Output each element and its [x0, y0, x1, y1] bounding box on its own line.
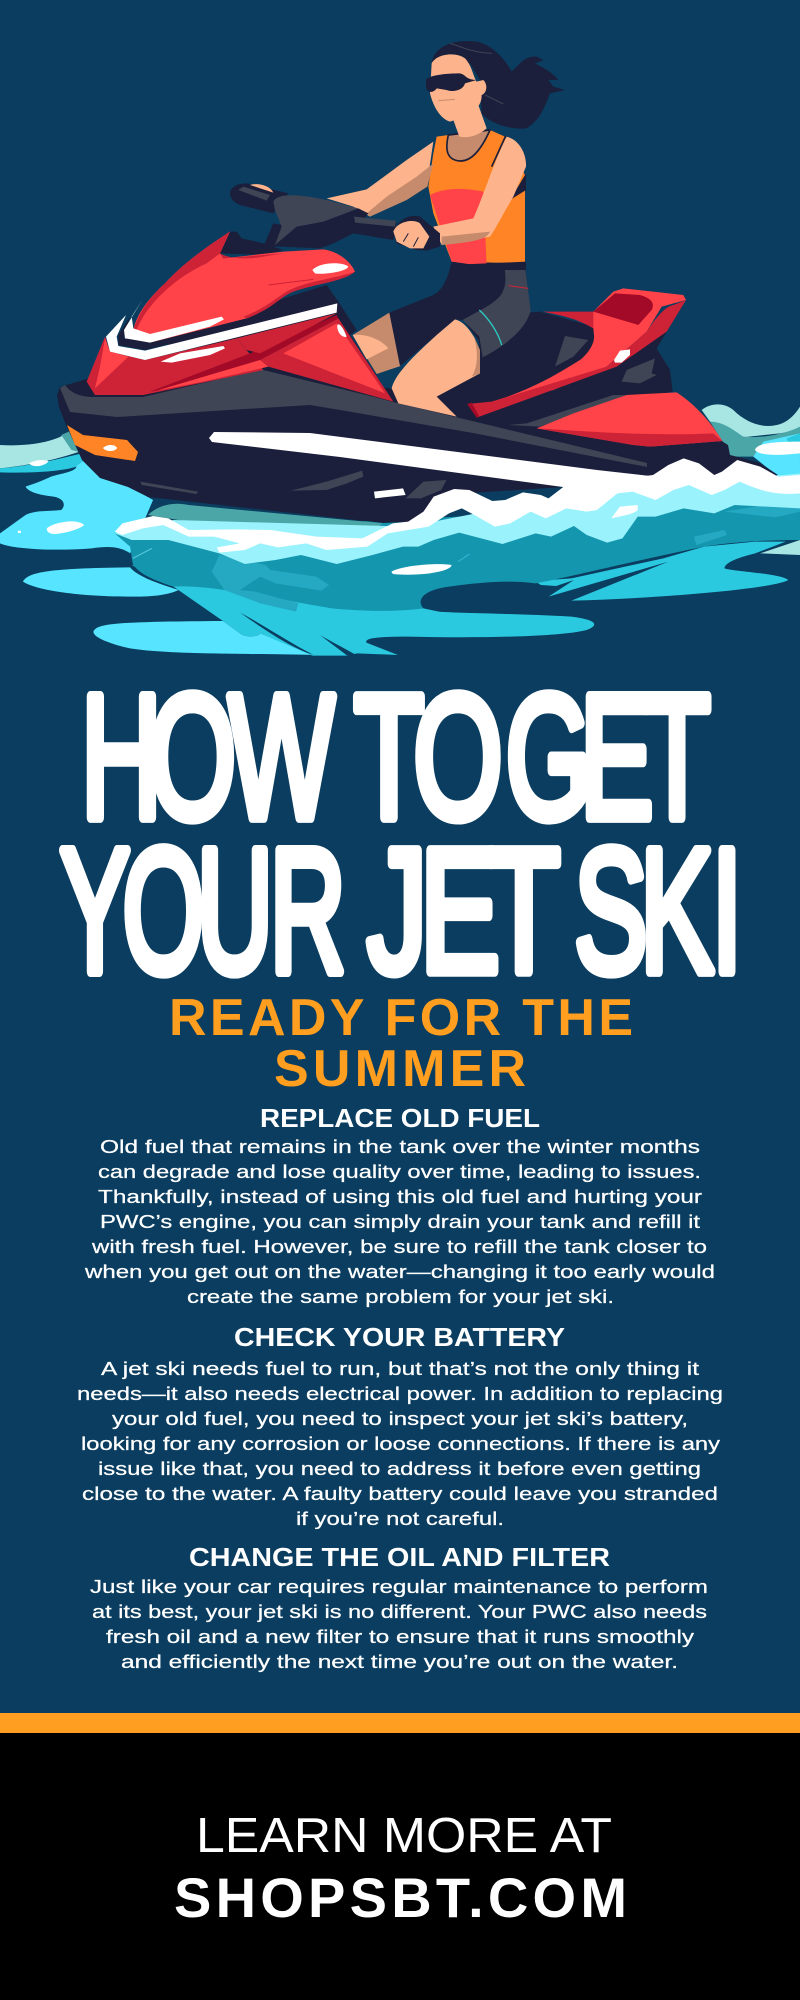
title [60, 658, 742, 1010]
orange divider band [0, 1713, 800, 1733]
far leg [353, 313, 401, 374]
hand and glove [393, 216, 440, 251]
left grip [230, 183, 288, 213]
body text: issue like that, you need to address it before even getting [98, 1458, 701, 1479]
front cowl [87, 232, 393, 402]
body text: if you’re not careful. [296, 1508, 504, 1529]
section: replace old fuel [84, 1103, 715, 1307]
body text: looking for any corrosion or loose connections. If there is any [81, 1433, 721, 1454]
body text [90, 1576, 708, 1672]
handlebar centre [263, 208, 397, 248]
heading: REPLACE OLD FUEL [260, 1103, 540, 1133]
title line 1: GET [506, 659, 711, 856]
body text: when you get out on the water—changing it too early would [84, 1261, 715, 1282]
subtitle: SUMMER [274, 1040, 526, 1098]
neck and face [453, 105, 487, 137]
footer panel [0, 1733, 800, 2000]
body text: create the same problem for your jet ski. [187, 1286, 614, 1307]
rider's shorts and near leg [389, 262, 531, 417]
section: change the oil and filter [90, 1542, 708, 1672]
title line 1 [81, 658, 711, 856]
title line 2: YOUR [60, 812, 346, 1009]
body text: needs—it also needs electrical power. In addition to replacing [77, 1383, 723, 1404]
body text: PWC’s engine, you can simply drain your tank and refill it [100, 1211, 700, 1232]
body text: fresh oil and a new filter to ensure that it runs smoothly [106, 1626, 695, 1647]
call to action: LEARN MORE AT [196, 1808, 612, 1863]
title line 1: TO [354, 658, 503, 855]
heading: CHECK YOUR BATTERY [234, 1322, 565, 1352]
website: SHOPSBT.COM [174, 1866, 627, 1929]
illustration: woman riding a red jet ski on water [0, 41, 800, 656]
sunglasses [426, 73, 477, 92]
body text: Old fuel that remains in the tank over the winter months [100, 1136, 700, 1157]
water behind and around the jet ski [0, 432, 800, 656]
far arm [327, 142, 433, 217]
body text: and efficiently the next time you’re out on the water. [121, 1651, 678, 1672]
seat and rear body [433, 312, 673, 427]
hull [57, 368, 778, 523]
body text [84, 1136, 715, 1307]
title line 2: JET [367, 813, 560, 1009]
body text: can degrade and lose quality over time, leading to issues. [98, 1161, 701, 1182]
body text: Just like your car requires regular maintenance to perform [90, 1576, 708, 1597]
body text: close to the water. A faulty battery could leave you stranded [82, 1483, 718, 1504]
water behind the stern [702, 404, 800, 477]
section: check your battery [77, 1322, 723, 1529]
tank top [428, 130, 525, 263]
body text [77, 1358, 723, 1529]
body text: Thankfully, instead of using this old fuel and hurting your [98, 1186, 702, 1207]
rear red fenders [467, 288, 722, 447]
title line 1: HOW [81, 659, 334, 856]
body text: with fresh fuel. However, be sure to refill the tank closer to [91, 1236, 707, 1257]
body text: A jet ski needs fuel to run, but that’s not the only thing it [101, 1358, 699, 1379]
title line 2: SKI [574, 813, 742, 1010]
near arm [433, 137, 526, 245]
subtitle: READY FOR THE [169, 989, 633, 1047]
subtitle [169, 989, 633, 1098]
wake foam [115, 458, 800, 564]
hair [432, 41, 565, 129]
deep wake [115, 500, 800, 611]
heading: CHANGE THE OIL AND FILTER [189, 1542, 610, 1572]
rider upper body and handlebars [230, 41, 565, 270]
body text: at its best, your jet ski is no different. Your PWC also needs [92, 1601, 707, 1622]
title line 2 [60, 812, 742, 1010]
body text: your old fuel, you need to inspect your jet ski’s battery, [112, 1408, 688, 1429]
